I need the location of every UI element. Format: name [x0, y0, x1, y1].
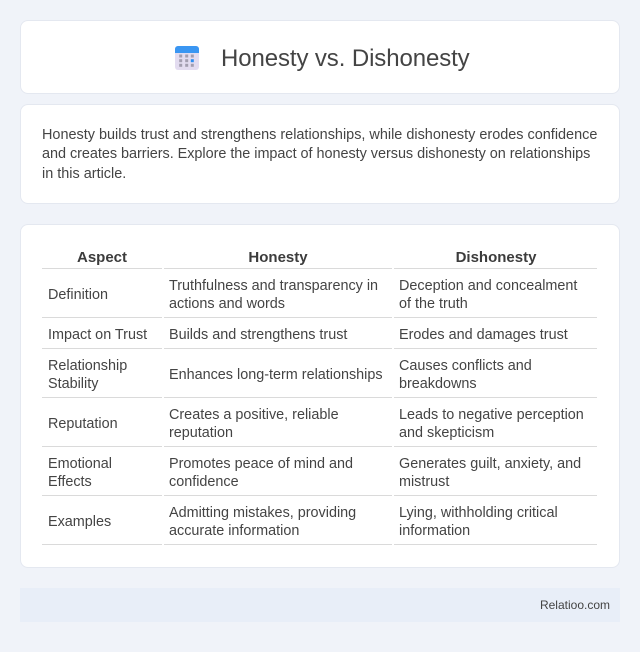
icon: calendar: [175, 46, 199, 70]
row: emotional effects: Promotes peace of mind and: [169, 456, 353, 472]
row: examples: [48, 505, 558, 539]
table headers: Aspect: [77, 249, 127, 266]
intro text: in this article.: [42, 166, 126, 182]
row: reputation: [48, 407, 584, 441]
row: examples: Admitting mistakes, providing: [169, 505, 356, 521]
row: reputation: reputation: [169, 425, 233, 441]
row: emotional effects: confidence: [169, 474, 239, 490]
row: relationship stability: [48, 358, 532, 392]
row: definition: Truthfulness and transparency in: [169, 278, 378, 294]
row: reputation: Creates a positive, reliable: [169, 407, 339, 423]
row: reputation: and skepticism: [399, 425, 494, 441]
row: examples: accurate information: [169, 523, 299, 539]
row: definition: [48, 278, 578, 312]
row: emotional effects: [48, 456, 581, 490]
row: definition: actions and words: [169, 296, 285, 312]
row: examples: information: [399, 523, 470, 539]
row: definition: Definition: [48, 287, 108, 303]
row: definition: Deception and concealment: [399, 278, 577, 294]
footer bar: [20, 588, 620, 622]
title card: [20, 20, 620, 94]
comparison table: [42, 249, 597, 545]
row: examples: Examples: [48, 514, 111, 530]
title: Honesty vs. Dishonesty: [221, 45, 470, 72]
row: impact on trust: Builds and strengthens trust: [169, 327, 347, 343]
panel: intro: [20, 104, 620, 204]
intro text: [42, 126, 597, 182]
row: examples: Lying, withholding critical: [399, 505, 558, 521]
intro text: and creates barriers. Explore the impact of honesty versus dishonesty on relationships: [42, 146, 590, 162]
table headers: [77, 249, 536, 266]
row lines: [42, 268, 597, 545]
row: relationship stability: breakdowns: [399, 376, 477, 392]
row: relationship stability: Enhances long-term relationships: [169, 367, 383, 383]
intro text: Honesty builds trust and strengthens relationships, while dishonesty erodes confidence: [42, 126, 597, 142]
row: emotional effects: Generates guilt, anxiety, and: [399, 456, 581, 472]
row: reputation: Reputation: [48, 416, 118, 432]
row: impact on trust: Erodes and damages trust: [399, 327, 568, 343]
row: relationship stability: Relationship: [48, 358, 127, 374]
row: relationship stability: Causes conflicts and: [399, 358, 532, 374]
row: impact on trust: Impact on Trust: [48, 327, 147, 343]
footer credit: Relatioo.com: [540, 598, 610, 612]
row: reputation: Leads to negative perception: [399, 407, 584, 423]
row: emotional effects: Effects: [48, 474, 92, 490]
table headers: Dishonesty: [456, 249, 536, 266]
row: emotional effects: Emotional: [48, 456, 112, 472]
row: definition: of the truth: [399, 296, 468, 312]
panel: comparison table: [20, 224, 620, 568]
table headers: Honesty: [248, 249, 308, 266]
row: relationship stability: Stability: [48, 376, 98, 392]
row: impact on trust: [48, 327, 568, 343]
row: emotional effects: mistrust: [399, 474, 449, 490]
